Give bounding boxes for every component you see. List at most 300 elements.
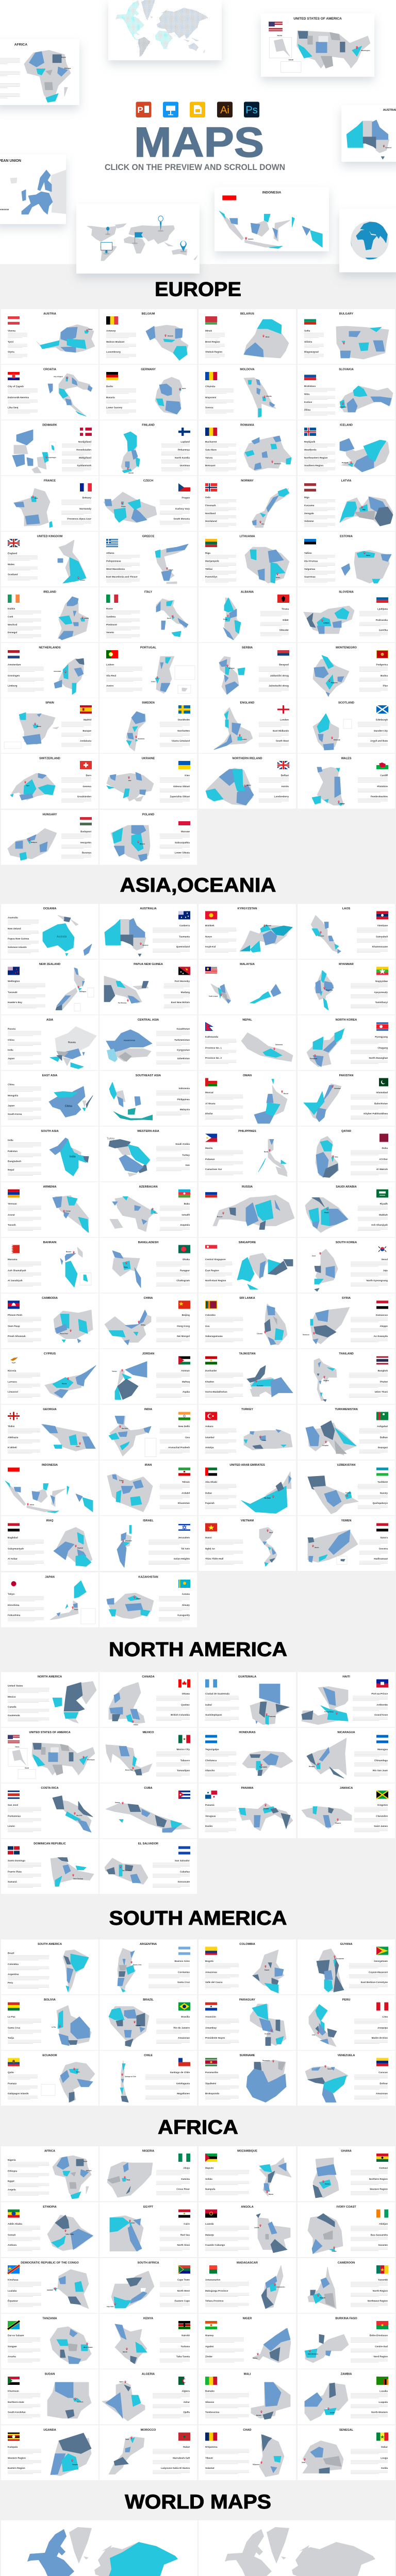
text: Managua	[377, 1748, 388, 1751]
title: TANZANIA	[42, 2317, 57, 2320]
text: Marijampolė	[205, 560, 219, 563]
map: Ljubljana	[323, 622, 329, 624]
text: Northern Region	[369, 2178, 388, 2180]
text: Vitebsk Region	[205, 350, 222, 353]
text: Muscat	[205, 1091, 213, 1094]
flag	[80, 817, 92, 825]
panel: Poland	[100, 810, 197, 865]
text: Antananarivo	[205, 2278, 221, 2281]
title: BURKINA FASO	[335, 2317, 357, 2320]
flag	[80, 483, 92, 492]
text	[8, 1685, 49, 1721]
text: Makkah	[379, 1214, 388, 1216]
text: Mexico	[8, 1696, 16, 1698]
panel: Slovenia	[298, 587, 395, 642]
text: Kingston	[377, 1804, 388, 1806]
map	[305, 2383, 348, 2421]
text: Veneto	[106, 631, 114, 634]
flag	[106, 650, 118, 658]
text: Baranya	[82, 851, 91, 854]
title: NEPAL	[242, 1019, 252, 1022]
text: Algiers	[182, 2389, 190, 2393]
title: JAMAICA	[340, 1787, 353, 1790]
panel: Burkina Faso	[298, 2314, 395, 2369]
map	[58, 597, 89, 640]
text: Pyongyang	[375, 1036, 388, 1038]
text: Veszprém	[80, 841, 91, 844]
text	[8, 2334, 40, 2362]
text	[148, 1960, 190, 1988]
map	[340, 386, 393, 412]
panel: Ireland	[1, 587, 98, 642]
text: United States	[8, 1685, 23, 1687]
text: Balochistan	[374, 1103, 388, 1105]
panel: France	[1, 476, 98, 531]
text: Blagoevgrad	[304, 350, 319, 353]
map: Vienna	[88, 328, 93, 330]
text: New Delhi	[178, 1425, 190, 1428]
text: Naryn	[205, 936, 212, 938]
text	[353, 1692, 388, 1721]
map: Manila	[264, 1151, 269, 1153]
panel: Uzbekistan	[298, 1460, 395, 1515]
text: Bishkek	[205, 924, 214, 927]
flag	[205, 1467, 217, 1476]
map	[4, 713, 59, 749]
text: Doha	[382, 1147, 388, 1149]
panel: Bahrain	[1, 1238, 98, 1293]
flag	[376, 2433, 388, 2441]
flag	[205, 2321, 217, 2329]
title: UKRAINE	[142, 757, 155, 760]
title: ARMENIA	[43, 1185, 57, 1189]
text: Socotra	[379, 1548, 388, 1550]
map: Oslo	[261, 523, 265, 525]
title: TURKEY	[241, 1408, 253, 1411]
text: Adrar	[184, 2401, 190, 2403]
text: Saint James	[374, 1825, 388, 1827]
map	[54, 1310, 93, 1343]
flag	[178, 483, 190, 492]
panel: Malaysia	[199, 959, 296, 1014]
title: ZAMBIA	[341, 2373, 352, 2376]
text: Kinshasa	[8, 2278, 19, 2281]
title: SURINAME	[240, 2054, 255, 2057]
title: SPAIN	[45, 702, 54, 705]
map	[12, 430, 56, 473]
text: North Hwanghae	[369, 1057, 388, 1059]
panel: Wales	[298, 754, 395, 809]
text: Turkmenistan	[174, 1039, 190, 1041]
text: Luanda	[205, 2223, 214, 2225]
panel: hero Africa slide	[0, 39, 79, 105]
title: MYANMAR	[339, 963, 354, 966]
text: Taita-Taveta	[176, 2355, 190, 2358]
flag	[178, 1300, 190, 1309]
text: Colombo	[205, 1314, 216, 1316]
flag	[376, 2002, 388, 2010]
map: Kampala	[72, 2464, 78, 2466]
text: Ismailli	[182, 1214, 190, 1216]
flag	[8, 967, 20, 975]
text	[160, 831, 190, 858]
text: Preah Sihanouk	[8, 1335, 26, 1337]
title: EGYPT	[143, 2206, 154, 2209]
text: Khuzestan	[178, 1502, 190, 1504]
text: Tirana	[282, 608, 289, 610]
map	[60, 1247, 91, 1287]
map	[305, 1197, 348, 1232]
title: SOUTH ASIA	[41, 1130, 59, 1133]
text: Quito	[8, 2071, 14, 2074]
title: LAOS	[342, 907, 351, 910]
panel: Ethiopia	[1, 2202, 98, 2257]
text: Olancho	[205, 1769, 215, 1772]
icon: Illustrator	[217, 102, 233, 117]
text: Ciudad de Guatemala	[205, 1692, 229, 1695]
flag	[8, 1523, 20, 1531]
map	[223, 598, 241, 640]
text: North Karelia	[175, 456, 190, 459]
map	[56, 968, 94, 1011]
text	[8, 664, 44, 691]
map	[308, 2267, 336, 2309]
text: East Macedonia and Thrace	[106, 575, 138, 578]
text	[354, 1804, 388, 1832]
text: Rio de Janeiro	[173, 2027, 190, 2029]
map	[151, 656, 195, 693]
flag	[205, 1791, 217, 1799]
map	[239, 1803, 293, 1831]
flag	[376, 911, 388, 919]
text: Zaqatala	[180, 1224, 190, 1226]
text: Žilina	[304, 408, 310, 411]
map: Phnom Penh	[60, 1332, 68, 1334]
text: Soroca	[205, 406, 213, 409]
text: Santo Domingo	[8, 1859, 25, 1862]
panel: Bangladesh	[100, 1238, 197, 1293]
flag	[376, 1735, 388, 1743]
panel: Brazil	[100, 1995, 197, 2050]
panel: North Korea	[298, 1015, 395, 1070]
panel: Peru	[298, 1995, 395, 2050]
text: Antofagasta	[176, 2082, 190, 2084]
map: Rīga	[362, 509, 366, 511]
text: La Paz	[8, 2015, 15, 2018]
panel: South America	[1, 1939, 98, 1994]
text: Iran	[186, 1164, 190, 1166]
map: Kumasi	[325, 2183, 330, 2185]
text: Uusimaa	[180, 464, 190, 467]
panel: Oceania	[1, 904, 98, 959]
title: SUDAN	[45, 2373, 55, 2376]
title: NORTH KOREA	[336, 1019, 357, 1022]
text	[8, 385, 38, 413]
flag	[80, 705, 92, 714]
text: Sulaymaniyah	[8, 1548, 24, 1550]
panel: Norway	[199, 476, 296, 531]
text	[160, 2278, 190, 2307]
text	[358, 1481, 388, 1509]
text: Basque	[82, 730, 91, 732]
map: Ottawa	[134, 1724, 138, 1726]
text: Limón	[8, 1825, 15, 1827]
text: Ethiopia	[8, 2170, 18, 2172]
flag	[205, 1022, 212, 1030]
panel: El Salvador	[100, 1839, 197, 1894]
text: Tanintharyi	[375, 1001, 388, 1004]
map	[107, 1473, 153, 1512]
title: GUATEMALA	[238, 1675, 256, 1679]
text	[8, 2159, 49, 2195]
text	[205, 1258, 232, 1286]
map	[247, 1365, 293, 1397]
text: Amambay	[205, 2027, 217, 2029]
title: PERU	[342, 1998, 350, 2002]
title: NIGER	[243, 2317, 252, 2320]
flag	[304, 428, 316, 436]
panel: Indonesia	[1, 1460, 98, 1515]
text: Lower Silesia	[175, 851, 190, 854]
map	[105, 918, 148, 956]
panel: Asia	[1, 1015, 98, 1070]
text: Camarines Sur	[205, 1168, 222, 1171]
flag	[376, 1680, 388, 1688]
title: ALGERIA	[142, 2373, 155, 2376]
text: Nepal	[8, 1168, 14, 1171]
text: Mongolia	[8, 1094, 19, 1097]
text: Djelfa	[183, 2411, 190, 2413]
text: Province No. 2	[205, 1057, 222, 1059]
flag	[376, 1412, 388, 1420]
text: Bobo-Dioulasso	[370, 2334, 388, 2337]
panel: Mali	[199, 2369, 296, 2425]
text	[160, 2334, 190, 2362]
text: N'Djamena	[205, 2446, 218, 2448]
map	[107, 2162, 153, 2197]
text: Västra Götaland	[172, 740, 190, 742]
map	[340, 438, 389, 472]
text: Cross River	[176, 2188, 190, 2191]
panel: Morocco	[100, 2426, 197, 2480]
map: Seoul	[312, 1255, 316, 1257]
text	[351, 2278, 388, 2307]
text: Brazil	[8, 1952, 14, 1955]
text	[358, 774, 388, 802]
text: Ljubljana	[377, 608, 388, 610]
flag	[178, 761, 190, 769]
flag	[205, 1356, 217, 1364]
text: Nei Mongol	[177, 1335, 190, 1337]
panel: Philippines	[199, 1126, 296, 1181]
map	[109, 2437, 144, 2474]
map	[107, 1138, 150, 1177]
text: Dakar	[381, 2446, 388, 2448]
map	[102, 2381, 145, 2421]
map: Naypyidaw	[326, 989, 334, 991]
title: CUBA	[144, 1787, 153, 1790]
text	[61, 718, 91, 747]
panel: Cuba	[100, 1784, 197, 1838]
map	[146, 325, 188, 361]
text	[61, 774, 91, 802]
text: Dushanbe	[205, 1369, 217, 1372]
title: ISRAEL	[143, 1519, 154, 1522]
chart: world map by continent	[27, 2527, 178, 2576]
map: San José	[76, 1815, 82, 1817]
text: Waloon Brabant	[106, 341, 125, 343]
text: Rome	[106, 607, 113, 610]
title: RUSSIA	[242, 1185, 253, 1189]
map	[214, 707, 253, 750]
map	[244, 319, 289, 358]
text: Western Region	[8, 2456, 26, 2460]
panel: Romania	[199, 420, 296, 475]
title: GEORGIA	[43, 1408, 57, 1411]
text: Thừa Thiên-Huế	[205, 1557, 224, 1560]
flag	[277, 650, 289, 658]
title: CHAD	[243, 2429, 252, 2432]
map	[313, 655, 349, 697]
text	[156, 1143, 190, 1171]
text: Peru	[8, 1981, 13, 1984]
text: Hong Kong	[177, 1325, 190, 1327]
text: Vidzeme	[304, 520, 314, 522]
title: SYRIA	[342, 1297, 351, 1300]
text: Baghdad	[8, 1536, 18, 1539]
map	[309, 2004, 337, 2046]
text: Egypt	[8, 2180, 14, 2182]
panel: Serbia	[199, 643, 296, 698]
title: SINGAPORE	[239, 1241, 256, 1244]
panel: Ghana	[298, 2146, 395, 2201]
text: Presidente Hayes	[205, 2037, 225, 2039]
text: Shkodër	[279, 629, 289, 632]
map	[109, 1082, 153, 1120]
title: NETHERLANDS	[39, 646, 61, 649]
text: Pembrokeshire	[371, 795, 388, 798]
icon: Photoshop: Ps	[245, 105, 258, 116]
flag	[8, 539, 20, 547]
title: IRELAND	[43, 590, 56, 594]
panel: Jamaica	[298, 1784, 395, 1838]
text	[8, 607, 41, 638]
map: Ankara	[261, 1439, 266, 1442]
map: Reykjavík	[342, 462, 349, 464]
title: CENTRAL ASIA	[138, 1019, 159, 1022]
text: Indonesia	[179, 1087, 190, 1090]
text: South Kordofan	[8, 2411, 26, 2413]
map: Georgetown	[336, 1958, 344, 1960]
map: Kathmandu	[275, 1044, 283, 1046]
text: Sofia	[304, 330, 310, 332]
panel: Suriname	[199, 2050, 296, 2106]
text: Toliara Province	[205, 2300, 224, 2302]
text	[351, 1258, 388, 1286]
text: Riga	[205, 552, 210, 554]
text: China	[8, 1039, 14, 1041]
flag	[277, 595, 289, 603]
text: Papua New Guinea	[8, 938, 29, 940]
text: Chagang	[377, 1047, 388, 1049]
text	[205, 1091, 243, 1120]
text: Jeju	[383, 1269, 388, 1272]
map: Algiers	[119, 2381, 124, 2383]
map: Athens	[169, 569, 173, 571]
text: Eastern Region	[8, 2467, 25, 2469]
flag	[376, 1946, 388, 1955]
map: Yerevan	[65, 1210, 71, 1212]
panel: Panama	[199, 1784, 296, 1838]
title: DOMINICAN REPUBLIC	[34, 1842, 66, 1845]
map	[254, 2213, 290, 2252]
text: Karlovy Vary	[175, 507, 190, 510]
panel: hero world map with pins	[76, 204, 200, 274]
text: Philippines	[177, 1098, 190, 1100]
panel: hero Indonesia slide	[214, 187, 329, 251]
text	[153, 2446, 190, 2474]
text: Agadez	[205, 2345, 214, 2348]
title: POLAND	[142, 813, 154, 816]
title: AUSTRIA	[43, 312, 56, 315]
text: Beograd	[279, 664, 289, 666]
text: Songwe	[8, 2345, 17, 2348]
text: Abidjan	[379, 2223, 388, 2225]
map: Panamá	[263, 1807, 269, 1809]
text: Budva	[381, 674, 388, 677]
text: Dubai	[205, 1492, 212, 1494]
flag	[178, 1245, 190, 1253]
text: Ararat	[8, 1214, 15, 1216]
map: Khartoum	[77, 2401, 84, 2403]
map	[308, 1476, 358, 1514]
panel: Africa	[1, 2146, 98, 2201]
text: Pirkanmaa	[178, 448, 190, 451]
text: City of Zagreb	[8, 385, 24, 387]
panel: Switzerland	[1, 754, 98, 809]
title: PARAGUAY	[239, 1998, 255, 2002]
map: Paris	[35, 497, 38, 499]
text: Athens	[106, 552, 114, 554]
text: Magallanes	[177, 2092, 190, 2095]
text	[205, 2334, 244, 2362]
text: Podgorica	[376, 664, 388, 666]
text: Al Wusta	[205, 1103, 216, 1105]
map	[14, 488, 53, 528]
text: Norrbotten	[177, 730, 190, 732]
panel: Iran	[100, 1460, 197, 1515]
text: Botoșani	[205, 464, 216, 467]
map	[110, 1196, 158, 1231]
map	[50, 1581, 95, 1624]
panel: South Asia	[1, 1126, 98, 1181]
flag	[8, 1467, 20, 1476]
text	[145, 2071, 190, 2099]
panel: Portugal	[100, 643, 197, 698]
text: Solomon Islands	[8, 946, 27, 948]
map: Egypt	[84, 2160, 87, 2162]
text: West Macedonia	[106, 568, 125, 570]
panel: Egypt	[100, 2202, 197, 2257]
text: Nisporeni	[205, 396, 216, 399]
app icons row	[136, 102, 259, 117]
text: Ashgabat	[377, 1425, 388, 1428]
text: Lisbon	[106, 664, 114, 666]
panel: Italy	[100, 587, 197, 642]
text	[205, 2446, 249, 2474]
text: Ida-Virumaa	[304, 560, 318, 563]
text: Oslo	[205, 496, 210, 499]
